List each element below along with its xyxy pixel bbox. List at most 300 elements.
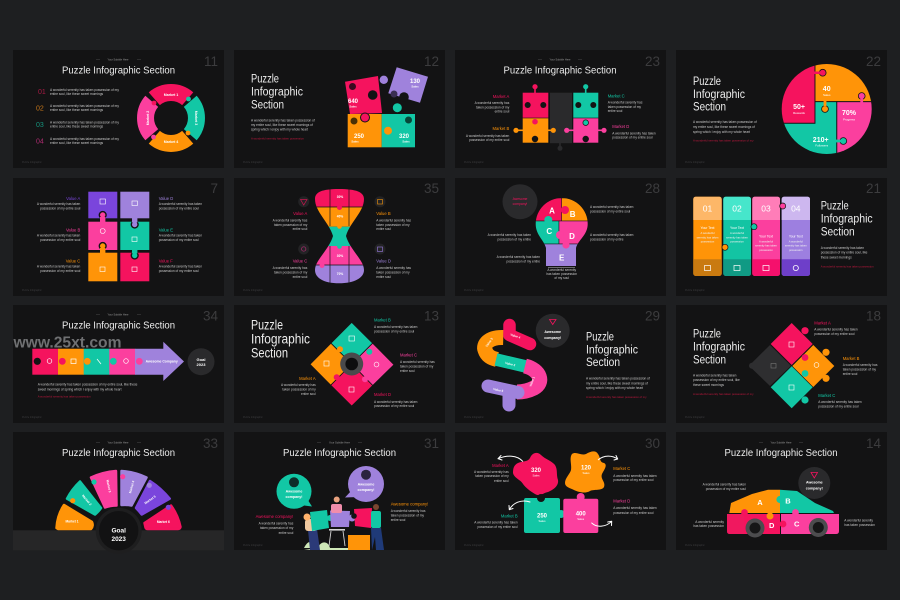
subtitle: Your Subtitle Here: [108, 312, 129, 316]
labels: Market D: [613, 499, 630, 504]
paragraph: A wonderful serenity has taken possession of: [586, 376, 650, 380]
column 02: possession: [730, 240, 744, 244]
puzzle pie chart: Sales: [823, 93, 831, 97]
labels: A wonderful serenity has taken: [612, 132, 656, 136]
labels: Value B: [376, 211, 391, 216]
column 04: possession: [789, 248, 803, 252]
labels: A wonderful serenity has taken: [613, 474, 657, 478]
jigsaw puzzle pieces with values: 130: [410, 79, 421, 85]
footer note: Puzzle Infographic: [685, 544, 705, 547]
labels: entire soul: [293, 275, 308, 279]
jigsaw puzzle pieces with values: 640: [348, 99, 359, 105]
heading: Infographic: [693, 342, 745, 354]
heading: [586, 332, 638, 369]
hourglass puzzle: 40%: [337, 214, 343, 218]
heading: [251, 317, 310, 360]
puzzle ring chart: Market 3: [194, 111, 198, 125]
footer note: Puzzle Infographic: [464, 289, 484, 292]
labels: Value B: [66, 228, 81, 232]
panel: slide 33: [13, 432, 224, 554]
column 03: possession: [759, 248, 773, 252]
orange jigsaw blob: 120: [581, 466, 592, 472]
left label: entire soul: [279, 531, 294, 535]
labels: A wonderful serenity has: [843, 363, 878, 367]
labels: [273, 211, 411, 279]
labels: A wonderful serenity has taken: [374, 400, 418, 404]
labels: taken possession of my: [274, 223, 308, 227]
heading: Puzzle: [821, 200, 849, 212]
orange jigsaw blob: [565, 451, 606, 493]
paragraph: [38, 382, 138, 398]
labels: possession of my entire soul: [159, 238, 199, 242]
hourglass puzzle: 30%: [337, 195, 343, 199]
paragraph: sweet mornings of spring which I enjoy with my whole heart: [38, 388, 122, 392]
panel: slide 28: [455, 178, 666, 296]
slide number: 31: [424, 436, 439, 451]
heading: Section: [821, 227, 855, 239]
labels: possession of my entire soul: [159, 269, 199, 273]
labels: A wonderful serenity has taken: [590, 233, 634, 237]
heading: [821, 200, 873, 239]
jigsaw puzzle pieces with values: 320: [399, 134, 410, 140]
teal jigsaw piece: 250: [537, 514, 548, 520]
list of four numbered items: entire soul, like these sweet mornings: [50, 92, 104, 96]
slide number: 28: [645, 181, 660, 196]
labels: Market C: [400, 352, 417, 358]
goal circle: [188, 348, 214, 375]
panel: slide 22: [676, 50, 887, 168]
footer note: Puzzle Infographic: [685, 289, 705, 292]
labels: entire soul: [608, 109, 623, 113]
heading: [251, 74, 303, 111]
labels: A wonderful serenity has: [376, 218, 411, 222]
icons: [298, 196, 386, 254]
labels: [466, 94, 656, 142]
lightbulb puzzle: A wonderful serenity: [547, 268, 576, 272]
labels: taken possession of my: [274, 271, 308, 275]
slide number: 33: [203, 436, 218, 451]
column 01: 01: [703, 204, 712, 214]
callout bubble: Awesome: [513, 197, 528, 201]
labels: A wonderful serenity has taken: [474, 520, 518, 524]
labels: A wonderful serenity has: [376, 266, 411, 270]
lightbulb puzzle: A: [549, 206, 555, 216]
heading: Puzzle: [693, 76, 721, 88]
list of four numbered items: entire soul, like these sweet mornings: [50, 124, 104, 128]
puzzle pie chart: [781, 63, 873, 156]
title: Puzzle Infographic Section: [724, 448, 838, 459]
car puzzle: C: [794, 520, 800, 528]
labels: Value C: [66, 258, 80, 264]
labels: [488, 205, 634, 264]
list of four numbered items: A wonderful serenity has taken possession of my: [50, 88, 119, 92]
puzzle pie chart: Followers: [815, 144, 829, 148]
callout bubble: company!: [513, 202, 527, 206]
paragraph: these sweet mornings: [693, 383, 724, 387]
slide number: 18: [866, 308, 881, 324]
labels: A wonderful serenity has taken: [159, 234, 202, 238]
labels: Market D: [374, 392, 391, 397]
teal speech bubble: company!: [286, 495, 302, 499]
list of four numbered items: 01: [38, 89, 46, 96]
paragraph: A wonderful serenity has taken possession: [38, 394, 91, 398]
labels: Market B: [493, 126, 509, 131]
slide number: 7: [210, 181, 218, 196]
goal circle: 2023: [197, 362, 206, 367]
labels: Market B: [374, 318, 391, 322]
paragraph: [251, 118, 315, 140]
labels: A wonderful serenity has taken: [497, 255, 540, 259]
labels: taken possession of my: [400, 365, 434, 369]
slide number: 12: [424, 54, 439, 69]
goal circle: Goal: [111, 528, 126, 534]
labels: possession of my entire soul: [612, 136, 653, 140]
column 02: serenity has taken: [726, 235, 748, 239]
labels: A wonderful serenity has taken: [37, 264, 81, 268]
right label: [391, 502, 428, 522]
list of four numbered items: 02: [36, 106, 44, 112]
labels: A wonderful serenity has: [475, 101, 510, 105]
labels: A wonderful serenity has taken: [613, 506, 657, 510]
pink jigsaw piece: 400: [576, 512, 586, 518]
column 01: possession: [701, 240, 715, 244]
teal speech bubble: Awesome: [286, 490, 302, 494]
labels: possession of my entire soul: [818, 404, 859, 408]
heading: Infographic: [821, 213, 873, 225]
panel: slide 30: [455, 432, 666, 550]
column 04: serenity has taken: [785, 244, 807, 248]
labels: A wonderful serenity has taken: [159, 264, 202, 268]
labels: A wonderful serenity has taken: [818, 400, 862, 404]
teal jigsaw piece: Sales: [538, 519, 546, 523]
slide number: 22: [866, 54, 881, 69]
slide number: 21: [866, 181, 881, 196]
column 01: serenity has taken: [697, 235, 719, 239]
paragraph: [586, 376, 650, 399]
labels: taken possession of my: [475, 474, 509, 478]
slide number: 29: [645, 308, 660, 324]
puzzle arrow: [32, 342, 184, 381]
paragraph: spring which I enjoy with my whole heart: [251, 128, 308, 132]
labels: Market A: [299, 376, 316, 381]
labels: A wonderful serenity has taken: [488, 233, 531, 237]
labels: possession of my entire: [507, 260, 540, 264]
labels: Value F: [159, 258, 173, 264]
slide number: 30: [645, 436, 660, 451]
title: Puzzle Infographic Section: [504, 66, 616, 76]
callout bubble: Awesome: [544, 330, 561, 334]
heading: Section: [693, 354, 726, 366]
dollar sign puzzle: Value 2: [505, 361, 516, 367]
labels: Value C: [293, 258, 307, 264]
labels: possession of my entire soul: [40, 269, 81, 273]
paragraph: A wonderful serenity has taken possession of my: [693, 138, 754, 142]
paragraph: my entire soul, like these sweet mornings of: [251, 123, 313, 127]
panel: slide 29: [455, 305, 666, 423]
column 03: A wonderful: [759, 240, 773, 244]
labels: [814, 320, 878, 408]
heading: [693, 76, 745, 114]
labels: taken possession of my: [476, 105, 510, 109]
panel: slide 7: [13, 178, 224, 296]
labels: A wonderful serenity: [844, 518, 873, 522]
red jigsaw blob: [513, 453, 558, 495]
labels: possession of my entire: [590, 238, 624, 242]
footer note: Puzzle Infographic: [464, 416, 484, 419]
paragraph: A wonderful serenity has taken possession of my: [586, 395, 647, 399]
puzzle ring chart: [146, 93, 198, 144]
left label: [256, 514, 294, 535]
callout bubble: [502, 184, 538, 219]
subtitle: [96, 58, 141, 62]
lightbulb puzzle: [535, 198, 589, 280]
subtitle: Your Subtitle Here: [329, 440, 351, 444]
panel: slide 23: [455, 50, 666, 168]
labels: [281, 318, 435, 408]
car puzzle: A: [757, 498, 763, 507]
fan of puzzle segments: Market 4: [128, 480, 135, 494]
right label: entire soul: [391, 518, 406, 522]
labels: possession of my entire soul: [374, 330, 415, 334]
paragraph: A wonderful serenity has taken possession of: [693, 120, 757, 124]
right label: Awesome company!: [391, 502, 428, 506]
lightbulb puzzle: C: [546, 227, 552, 236]
column 02: 02: [732, 204, 742, 214]
lilac speech bubble: company!: [358, 488, 374, 492]
column 04: 04: [791, 204, 801, 214]
list of four numbered items: A wonderful serenity has taken possession of my: [50, 137, 119, 141]
slide number: 34: [203, 308, 218, 324]
labels: A wonderful serenity has: [281, 383, 316, 387]
labels: entire soul: [376, 275, 391, 279]
heading: Puzzle: [251, 74, 279, 86]
footer note: Puzzle Infographic: [685, 416, 705, 419]
labels: A wonderful serenity has: [400, 360, 435, 364]
labels: possession of my entire soul: [40, 206, 81, 210]
subtitle: Your Subtitle Here: [108, 58, 129, 62]
labels: Value D: [376, 258, 391, 264]
left label: Awesome company!: [256, 514, 293, 519]
dollar sign puzzle: Value 1: [528, 376, 536, 387]
labels: Value E: [159, 228, 173, 232]
panel: slide 31: [234, 432, 445, 550]
paragraph: A wonderful serenity has taken possession of my: [693, 392, 754, 396]
labels: possession of my entire soul: [814, 332, 855, 336]
column 04: [780, 197, 810, 276]
labels: taken possession of my: [608, 105, 641, 109]
panel: slide 14: [676, 432, 887, 550]
column 02: A wonderful: [730, 231, 744, 235]
column 04: Your Text: [789, 234, 803, 238]
labels: entire soul: [495, 110, 510, 114]
jigsaw puzzle pieces with values: [345, 67, 428, 147]
column 01: [693, 197, 722, 276]
subtitle: Your Subtitle Here: [771, 440, 792, 444]
paragraph: A wonderful serenity has taken: [821, 246, 864, 250]
column 03: Your Text: [759, 234, 773, 238]
panel: slide 34: [12, 305, 224, 423]
callout bubble: [798, 467, 830, 499]
hourglass puzzle: [315, 189, 364, 284]
labels: possession of my entire soul: [613, 478, 654, 482]
dollar sign puzzle: Value 4: [510, 333, 521, 340]
hourglass puzzle: 30%: [337, 254, 343, 258]
labels: possession of my entire soul: [706, 487, 746, 491]
footer note: Puzzle Infographic: [685, 161, 705, 164]
panel: slide 12: [234, 50, 445, 168]
labels: A wonderful serenity has taken: [814, 328, 858, 332]
labels: possession of my entire soul: [40, 238, 81, 242]
footer note: Puzzle Infographic: [464, 161, 484, 164]
subtitle: [96, 312, 141, 316]
labels: Market C: [608, 94, 625, 98]
heading: Section: [251, 345, 288, 360]
labels: A wonderful serenity has taken: [466, 134, 510, 138]
paragraph: these sweet mornings: [821, 255, 852, 259]
paragraph: A wonderful serenity has taken possession of my entire soul, like these: [38, 382, 138, 386]
callout bubble: company!: [806, 487, 823, 491]
labels: [474, 463, 657, 529]
heading: Section: [586, 357, 620, 369]
left label: taken possession of my: [260, 526, 294, 530]
watermark: www.25xt.com: [12, 334, 122, 352]
footer note: Puzzle Infographic: [243, 161, 263, 164]
labels: Value A: [293, 211, 308, 216]
labels: Market A: [492, 463, 509, 468]
puzzle arrow: Awesome Company: [146, 360, 178, 364]
labels: taken possession of my: [843, 368, 876, 372]
slide number: 13: [424, 308, 439, 324]
footer note: Puzzle Infographic: [243, 544, 263, 547]
column 01: A wonderful: [700, 231, 715, 235]
subtitle: Your Subtitle Here: [550, 58, 571, 62]
column 02: Your Text: [730, 226, 744, 230]
lightbulb puzzle: E: [559, 254, 565, 262]
goal circle: 2023: [111, 536, 126, 543]
labels: [37, 196, 202, 273]
jigsaw puzzle pieces with values: 250: [354, 134, 365, 140]
right label: A wonderful serenity has: [391, 509, 426, 513]
paragraph: [693, 374, 754, 396]
paragraph: A wonderful serenity has taken possession: [821, 264, 874, 268]
labels: Market C: [818, 393, 835, 398]
heading: Puzzle: [693, 329, 721, 341]
callout bubble: [536, 314, 570, 348]
paragraph: A wonderful serenity has taken possession: [251, 136, 304, 140]
lightbulb puzzle: of my soul: [554, 276, 569, 280]
labels: taken possession of my: [376, 223, 410, 227]
callout bubble: Awesome: [806, 480, 823, 484]
labels: has taken possession: [844, 523, 875, 527]
heading: Infographic: [586, 344, 638, 356]
callout bubble: company!: [544, 336, 561, 340]
fan of puzzle segments: Market 6: [157, 520, 170, 524]
heading: Infographic: [693, 89, 745, 101]
footer note: Puzzle Infographic: [243, 416, 263, 419]
paragraph: possession of my entire soul, like: [693, 378, 740, 382]
dollar sign puzzle: [485, 325, 540, 405]
subtitle: [317, 440, 362, 444]
title: Puzzle Infographic Section: [62, 66, 175, 76]
pink jigsaw piece: Sales: [577, 517, 585, 521]
goal circle: [96, 508, 142, 554]
list of four numbered items: A wonderful serenity has taken possession of my: [50, 104, 119, 108]
hourglass puzzle: 70%: [337, 272, 343, 276]
labels: Market D: [612, 124, 629, 129]
paragraph: [693, 120, 757, 142]
list of four numbered items: entire soul, like these sweet mornings: [50, 108, 104, 112]
puzzle pie chart: 70%: [842, 110, 857, 117]
puzzle ring chart: Market 4: [164, 140, 178, 144]
column 04: A wonderful: [789, 240, 803, 244]
labels: possession of my entire soul: [477, 525, 518, 529]
labels: Value D: [159, 196, 173, 201]
lilac speech bubble: Awesome: [358, 482, 374, 486]
list of four numbered items: A wonderful serenity has taken possession of my: [50, 120, 119, 124]
puzzle pie chart: Progress: [843, 118, 855, 122]
fan of puzzle segments: Market 1: [66, 520, 79, 524]
fan of puzzle segments: Market 5: [144, 494, 157, 505]
car puzzle: B: [785, 496, 791, 506]
footer note: Puzzle Infographic: [22, 161, 42, 164]
jigsaw puzzle pieces with values: Sales: [349, 104, 357, 108]
panel: slide 21: [676, 178, 887, 296]
panel: slide 11: [13, 50, 224, 168]
slide number: 23: [645, 54, 660, 69]
puzzle pie chart: 210+: [813, 137, 829, 144]
puzzle grid: [513, 84, 607, 151]
labels: entire soul: [301, 392, 316, 396]
labels: A wonderful serenity has taken: [590, 205, 634, 209]
jigsaw puzzle pieces with values: Sales: [402, 140, 410, 144]
paragraph: my entire soul, like these sweet mornings of: [586, 382, 648, 386]
footer note: Puzzle Infographic: [22, 416, 42, 419]
column 03: serenity has taken: [755, 244, 777, 248]
labels: A wonderful serenity has taken: [374, 325, 418, 329]
heading: Section: [251, 99, 284, 111]
heading: Puzzle: [586, 332, 614, 344]
puzzle pie chart: Rewards: [793, 111, 805, 115]
paragraph: spring which I enjoy with my whole heart: [693, 130, 750, 134]
labels: A wonderful serenity has: [474, 470, 509, 474]
labels: Market B: [501, 514, 518, 518]
labels: A wonderful serenity has taken: [159, 202, 202, 206]
labels: entire soul: [293, 227, 308, 231]
labels: Market B: [843, 356, 860, 361]
labels: possession of my entire soul: [469, 138, 510, 142]
slide number: 11: [204, 54, 218, 69]
list of four numbered items: entire soul, like these sweet mornings: [50, 141, 104, 145]
labels: Market A: [814, 320, 831, 326]
teal jigsaw piece: [524, 494, 565, 533]
puzzle grid of six tiles: [88, 192, 149, 281]
heading: [693, 329, 745, 366]
labels: possession of my entire soul: [590, 210, 631, 214]
lilac speech bubble: [345, 466, 384, 502]
puzzle pie chart: 40: [823, 86, 831, 93]
labels: [693, 482, 875, 528]
footer note: Puzzle Infographic: [464, 544, 484, 547]
fan of puzzle segments: Market 3: [105, 479, 112, 493]
paragraph: [821, 246, 874, 268]
slide number: 14: [866, 436, 881, 451]
labels: A wonderful serenity: [695, 520, 724, 524]
diamond puzzle: [310, 322, 394, 406]
labels: A wonderful serenity has taken: [37, 202, 81, 206]
puzzle ring chart: Market 2: [146, 111, 150, 125]
list of four numbered items: 04: [36, 138, 44, 146]
labels: A wonderful serenity has: [273, 218, 308, 222]
